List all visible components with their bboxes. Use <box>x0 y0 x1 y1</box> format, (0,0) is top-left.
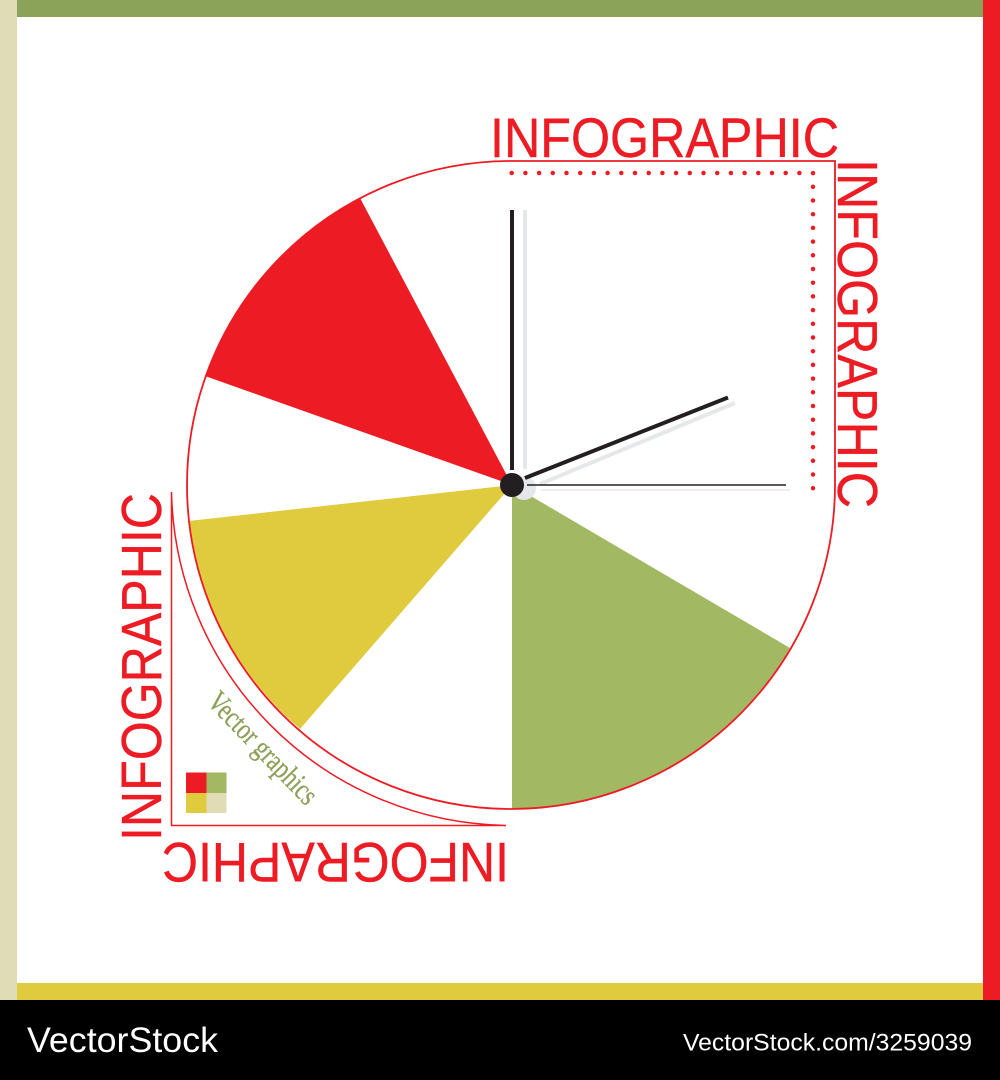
hand: horizontal thin <box>527 484 786 486</box>
hand: vertical <box>510 210 514 470</box>
heading: bottom inverted INFOGRAPHIC: INFOGRAPHIC <box>162 831 509 894</box>
clock centre pivot <box>500 473 524 497</box>
wedge: yellow <box>188 485 512 729</box>
border: top green band <box>17 0 983 17</box>
dotted red corner line <box>512 173 813 489</box>
footer brand text: VectorStock <box>27 1021 219 1060</box>
corner bracket with outer arc <box>172 492 506 826</box>
hand: diagonal <box>525 398 728 478</box>
border: right red band <box>983 0 1000 1000</box>
caption: Vector graphics: Vector graphics <box>201 685 325 811</box>
legend: four colour squares <box>186 772 226 813</box>
wedge: red <box>205 198 512 485</box>
chart outline: teardrop with square corner <box>187 161 835 809</box>
heading: top INFOGRAPHIC: INFOGRAPHIC <box>490 106 839 169</box>
heading: right rotated INFOGRAPHIC: INFOGRAPHIC <box>825 159 889 508</box>
footer: black watermark bar <box>0 1000 1000 1080</box>
wedge: green <box>512 485 790 809</box>
clock hands shadows <box>512 210 790 500</box>
border: bottom yellow band <box>17 983 983 1000</box>
pie chart: clock-style wedges <box>187 161 835 809</box>
clock hands <box>512 210 786 485</box>
heading: left rotated INFOGRAPHIC: INFOGRAPHIC <box>110 493 174 841</box>
border: left beige band <box>0 0 17 1000</box>
footer image id text: VectorStock.com/3259039 <box>683 1030 972 1056</box>
